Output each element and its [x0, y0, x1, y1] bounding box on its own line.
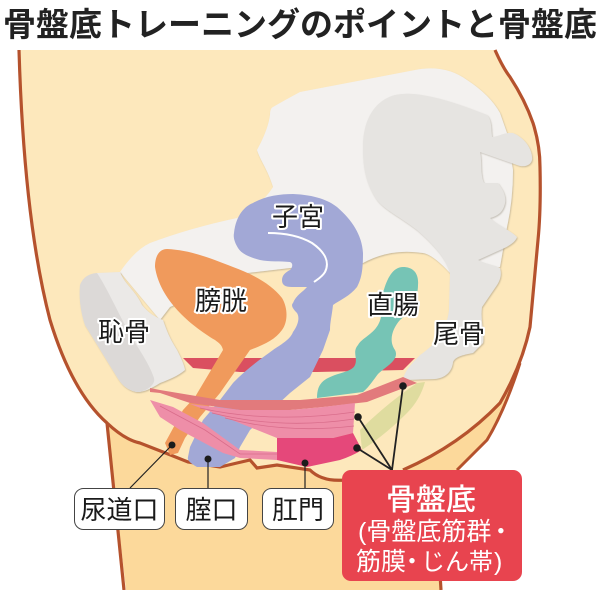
label box: anus: 肛門 [272, 495, 324, 525]
callout: pelvic floor: じん帯 [421, 549, 493, 576]
callout: pelvic floor: ) [494, 548, 502, 576]
label: pubic bone: 恥骨 [98, 317, 150, 347]
label box: vaginal opening [176, 488, 248, 530]
rectum [317, 267, 418, 398]
pink muscle with stripes [190, 403, 355, 438]
callout: pelvic floor: 骨盤底 [386, 484, 476, 517]
label box: anus [262, 488, 334, 530]
pelvis bone (light) [120, 68, 513, 320]
callout: pelvic floor [342, 470, 522, 581]
bulbospongiosus muscle [150, 400, 277, 460]
title: 骨盤底トレーニングのポイントと骨盤底 [3, 6, 597, 43]
callout: pelvic floor: 筋膜 [356, 548, 406, 576]
label: uterus: 子宮 [272, 202, 324, 232]
bladder and urethra [155, 249, 286, 455]
label: bladder: 膀胱 [195, 286, 247, 316]
label: coccyx: 尾骨 [433, 319, 485, 349]
callout: pelvic floor: ・ [400, 548, 425, 576]
anal sphincter [277, 433, 362, 467]
label: rectum: 直腸 [367, 290, 419, 320]
olive ligament [360, 382, 425, 450]
body silhouette [19, 50, 540, 590]
salmon muscle [150, 377, 417, 410]
pubic bone [80, 272, 185, 392]
label box: urethral opening: 尿道口 [80, 495, 159, 525]
label box: urethral opening [74, 488, 164, 530]
label box: vaginal opening: 腟口 [185, 495, 238, 525]
uterus and vagina [188, 194, 363, 467]
sacrum [363, 94, 532, 380]
callout: pelvic floor: (骨盤底筋群・ [358, 518, 513, 546]
marker dots [168, 382, 407, 466]
red band [183, 358, 415, 372]
leader lines [130, 386, 403, 488]
